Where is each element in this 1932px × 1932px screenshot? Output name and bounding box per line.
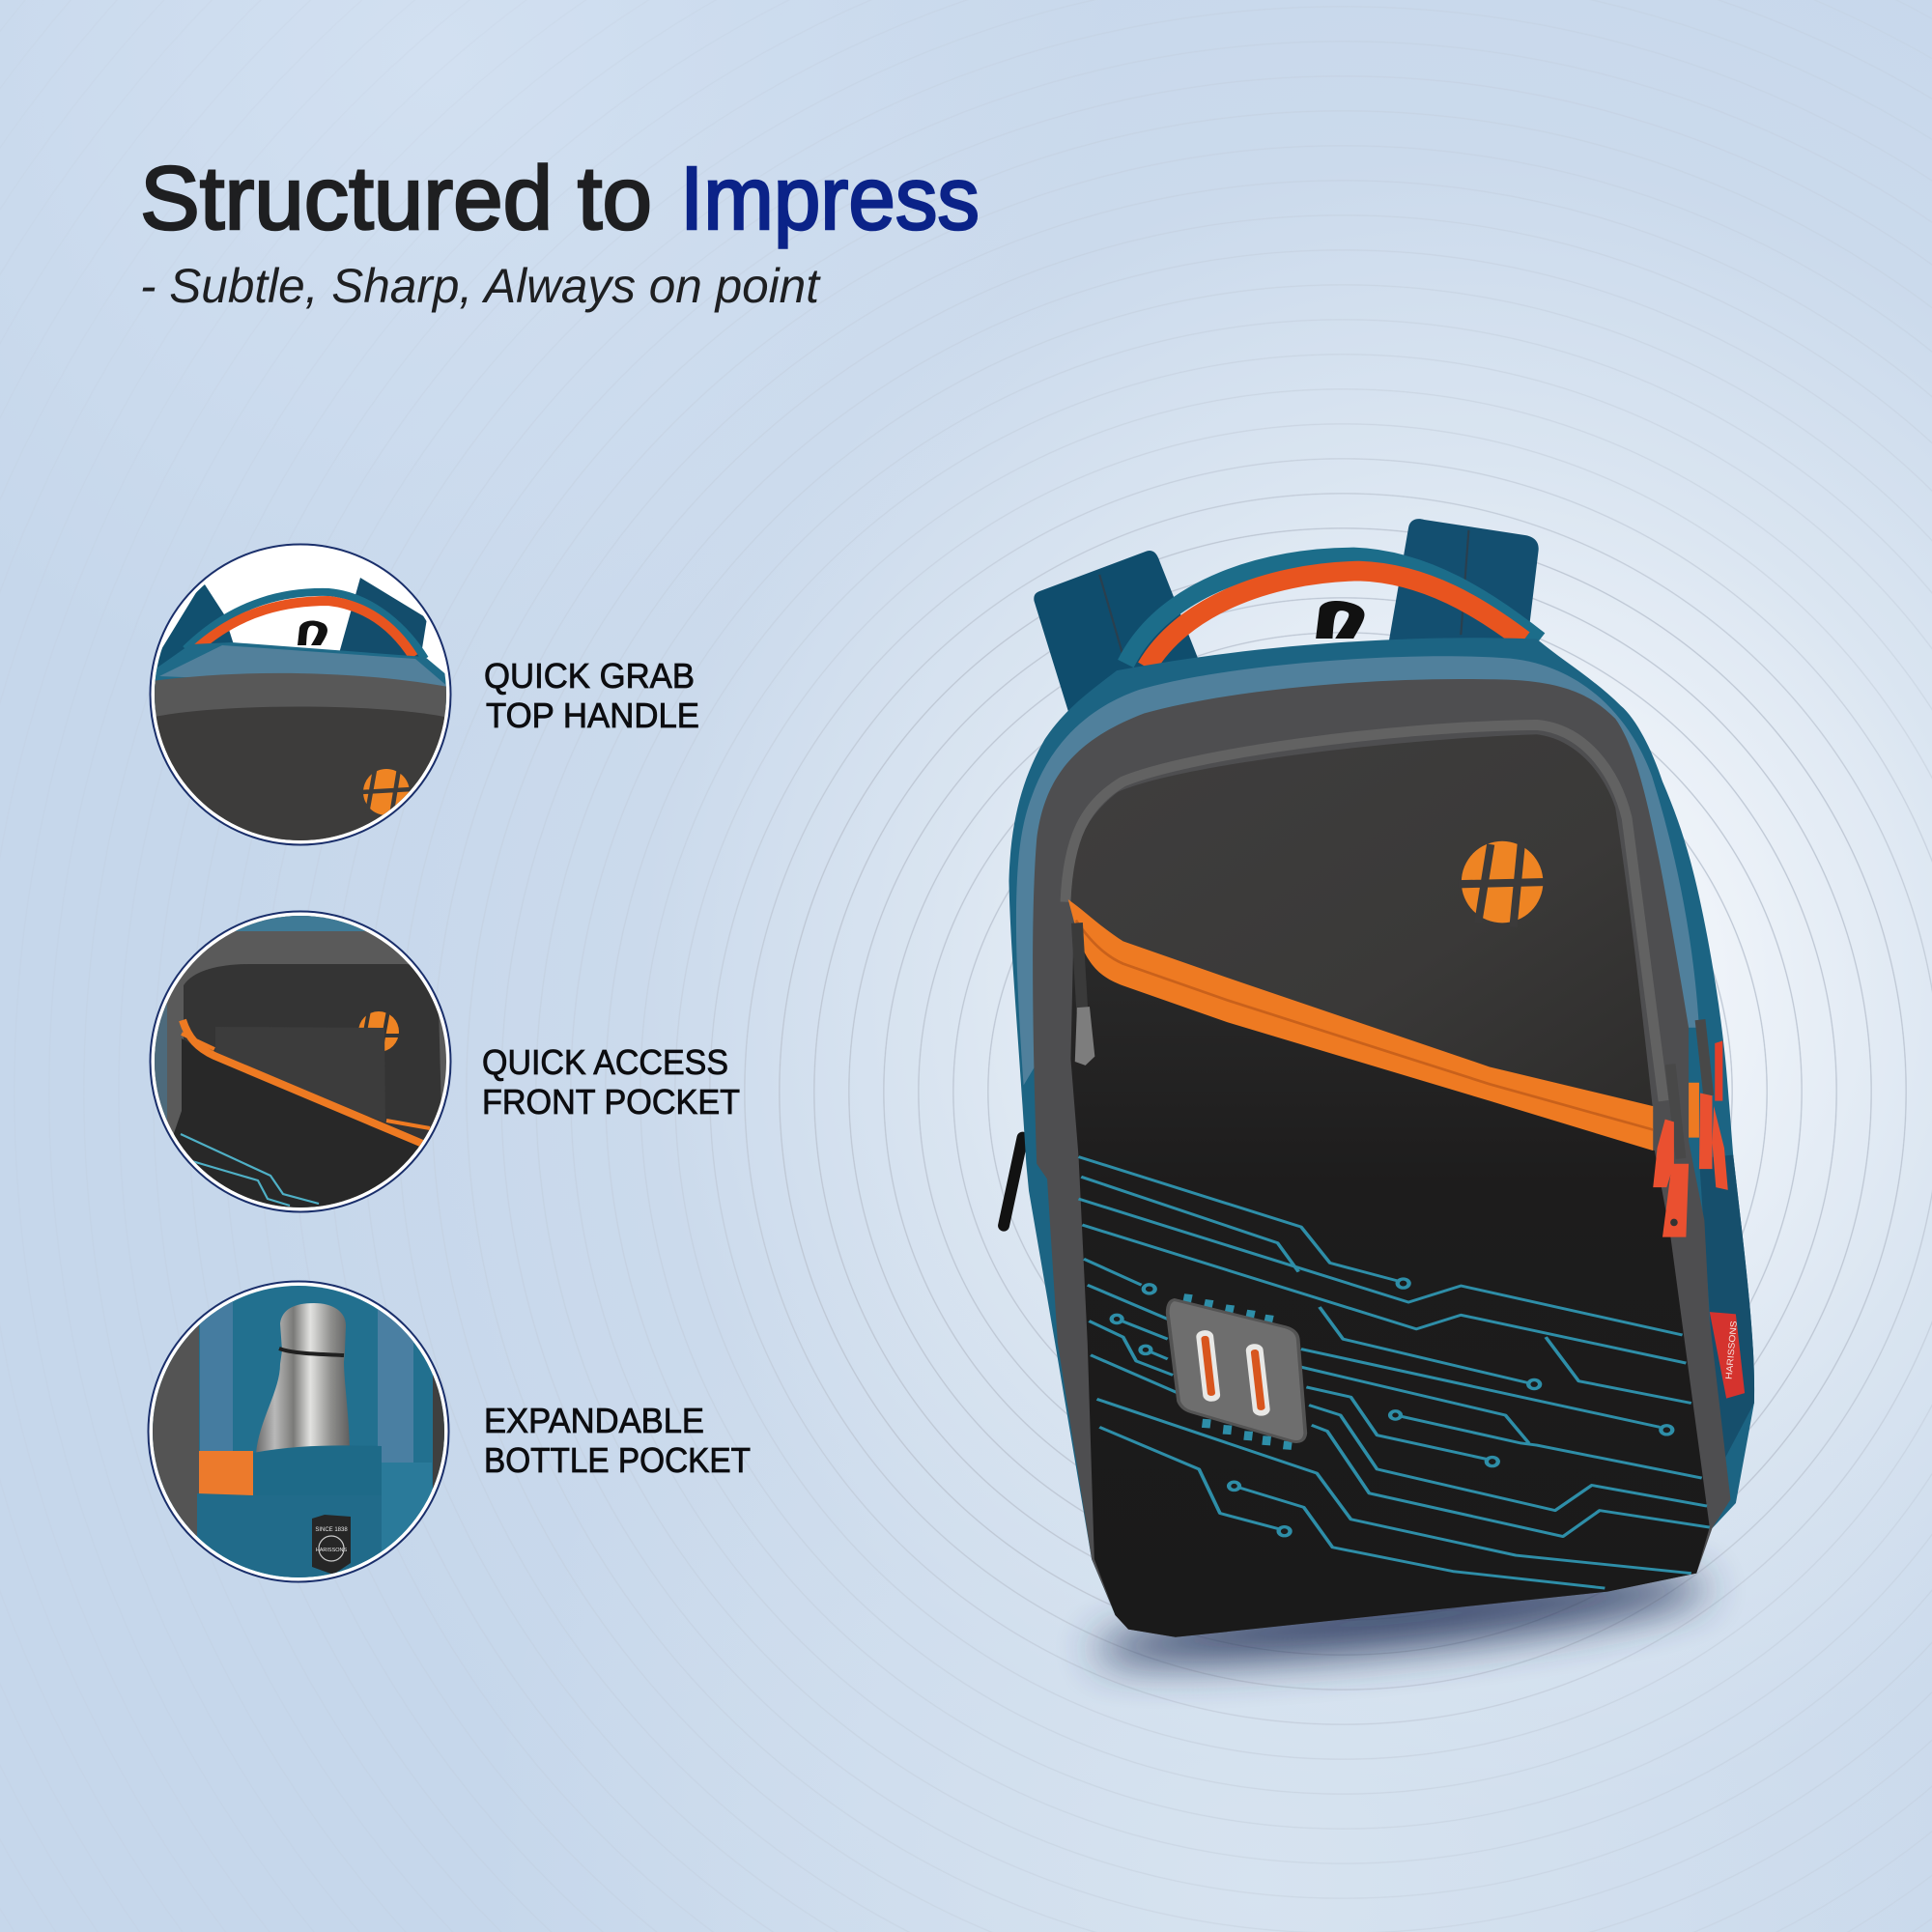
straps (1034, 519, 1539, 711)
brand tab (1710, 1312, 1745, 1399)
detail circle: bottle pocket (145, 1275, 454, 1594)
left zipper pull (1075, 923, 1094, 1065)
detail circle: bottle pocket: HARISSONS (316, 1548, 348, 1553)
brand tab: HARISSONS (1724, 1321, 1739, 1379)
upper pocket panel (1068, 734, 1653, 1112)
grey front panel (1033, 679, 1730, 1637)
orange zip (1068, 899, 1653, 1151)
title (140, 148, 980, 248)
bag shadow (1091, 1558, 1711, 1680)
top handle (1125, 556, 1540, 668)
circuit pattern (1079, 1157, 1710, 1588)
label: expandable bottle pocket: EXPANDABLE (484, 1401, 704, 1440)
detail circle: top handle (145, 541, 454, 850)
backpack (1004, 519, 1754, 1637)
side cord (1004, 1138, 1023, 1226)
label: expandable bottle pocket: BOTTLE POCKET (484, 1440, 751, 1480)
label: expandable bottle pocket (484, 1401, 751, 1480)
label: quick access front pocket: FRONT POCKET (482, 1082, 740, 1122)
right zipper pulls (1653, 1020, 1728, 1237)
title: Impress (680, 148, 980, 248)
title: Structured to (140, 148, 652, 248)
label: quick grab top handle (484, 656, 699, 735)
logo (1459, 840, 1545, 927)
label: quick access front pocket (482, 1042, 740, 1122)
lower pocket panel (1070, 944, 1710, 1637)
detail circle: bottle pocket: SINCE 1838 (315, 1527, 348, 1533)
label: quick access front pocket: QUICK ACCESS (482, 1042, 728, 1082)
detail circle: front pocket (145, 908, 454, 1217)
binding band (1016, 656, 1699, 1085)
bag body back (1009, 638, 1754, 1615)
label: quick grab top handle: TOP HANDLE (486, 696, 699, 735)
label: quick grab top handle: QUICK GRAB (484, 656, 695, 696)
subtitle: - Subtle, Sharp, Always on point (140, 259, 821, 313)
chip patch (1168, 1300, 1305, 1441)
panel rim (1065, 724, 1663, 1101)
